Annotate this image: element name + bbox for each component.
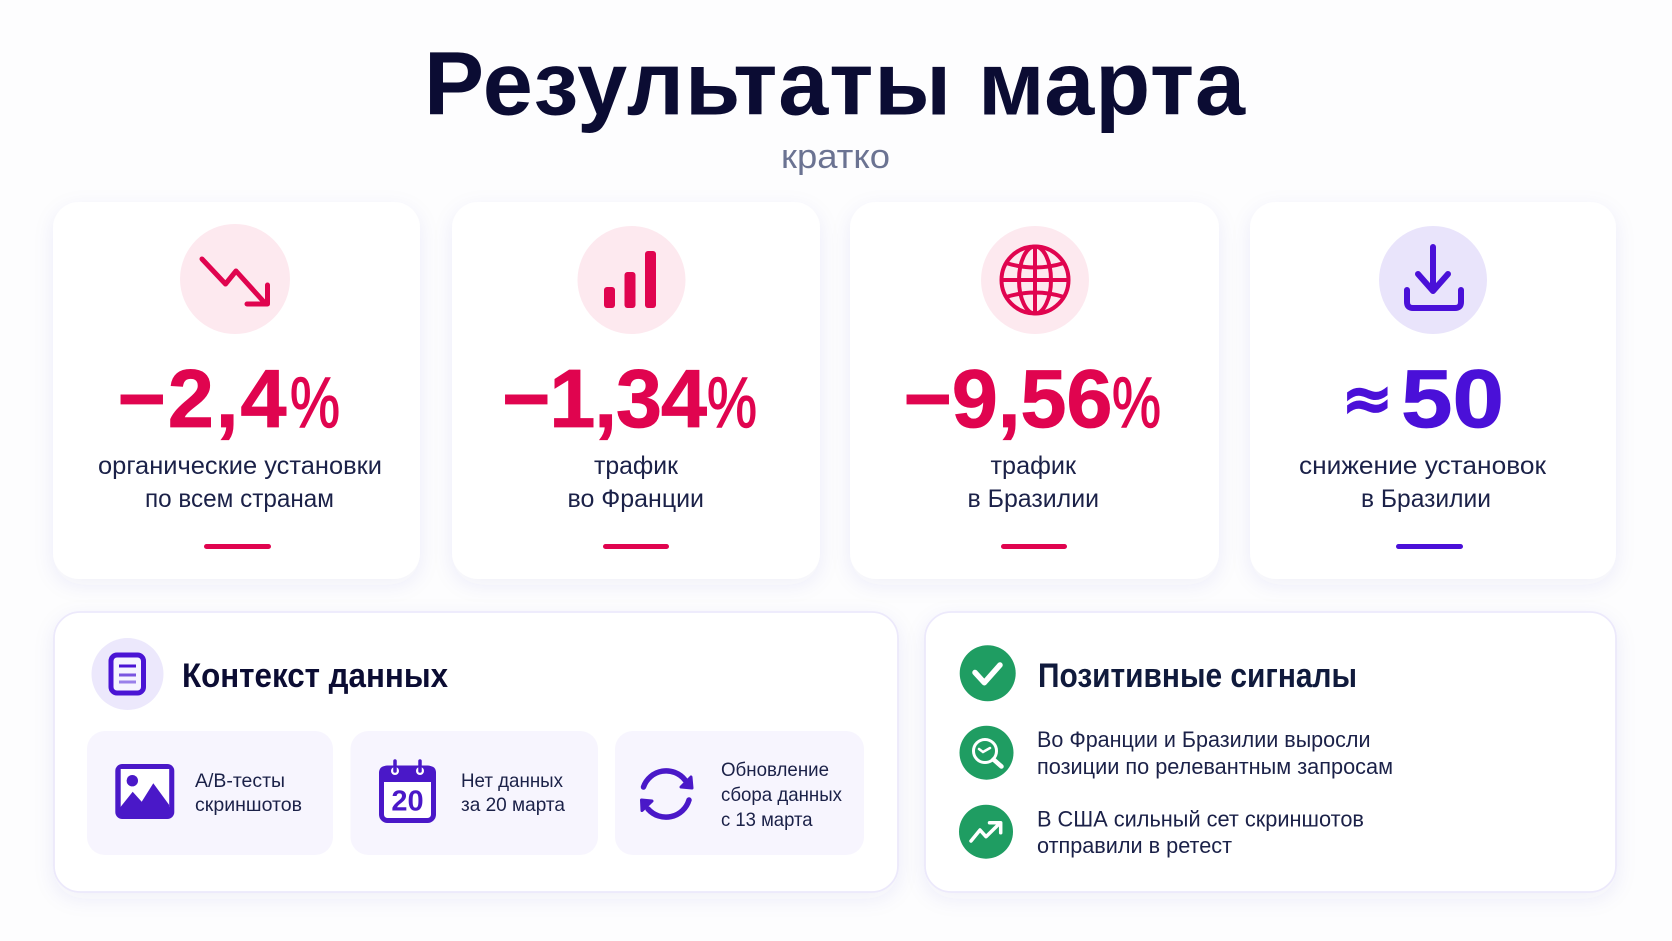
- label: в Бразилии: [968, 485, 1099, 513]
- label: [98, 452, 382, 513]
- text: Обновление: [721, 759, 829, 781]
- label: органические установки: [98, 452, 382, 480]
- percent sign: %: [1112, 364, 1161, 443]
- icon: download: [1379, 226, 1487, 334]
- text: сбора данных: [721, 784, 842, 806]
- panel: organic installs: [53, 202, 420, 579]
- icon: check: [960, 645, 1016, 701]
- text: с 13 марта: [721, 809, 813, 831]
- label: [968, 452, 1099, 513]
- sub-card: refresh: [615, 731, 864, 855]
- label: по всем странам: [145, 485, 334, 513]
- label: [1299, 452, 1547, 513]
- icon: trend up: [959, 805, 1013, 859]
- value: −1,34: [502, 352, 707, 445]
- label: в Бразилии: [1361, 485, 1491, 513]
- text: позиции по релевантным запросам: [1037, 754, 1393, 779]
- text: за 20 марта: [461, 794, 565, 816]
- label: во Франции: [568, 485, 704, 513]
- icon: image: [115, 764, 174, 819]
- label: трафик: [594, 452, 679, 480]
- panel: Brazil traffic: [850, 202, 1219, 579]
- sub-card: no data: [350, 731, 598, 855]
- icon: calendar: [379, 761, 436, 820]
- panel: France traffic: [452, 202, 820, 579]
- icon: magnifier: [960, 726, 1014, 780]
- signal: USA: [959, 805, 1364, 859]
- icon: calendar: 20: [391, 786, 424, 818]
- text: [461, 770, 565, 816]
- title: Результаты марта: [424, 34, 1246, 134]
- icon: globe: [981, 226, 1089, 334]
- icon: bars: [578, 226, 686, 334]
- value: −2,4: [118, 352, 286, 445]
- panel: Brazil installs: [1250, 202, 1616, 579]
- text: [721, 759, 842, 831]
- text: [1037, 727, 1393, 779]
- text: В США сильный сет скриншотов: [1037, 806, 1364, 832]
- heading: Контекст данных: [182, 657, 448, 695]
- subtitle: кратко: [781, 138, 890, 176]
- label: снижение установок: [1299, 452, 1547, 480]
- icon: document: [92, 638, 164, 710]
- text: скриншотов: [195, 794, 302, 816]
- label: [568, 452, 704, 513]
- text: Во Франции и Бразилии выросли: [1037, 727, 1370, 752]
- signal: France and Brazil: [960, 726, 1393, 780]
- icon: trend down: [180, 224, 290, 334]
- text: А/В-тесты: [195, 770, 285, 792]
- panel: data context: [54, 612, 898, 892]
- sub-card: A/B tests: [87, 731, 333, 855]
- value: 50: [1401, 352, 1504, 445]
- text: отправили в ретест: [1037, 833, 1232, 858]
- label: трафик: [990, 452, 1077, 480]
- text: Нет данных: [461, 770, 563, 792]
- text: [1037, 806, 1364, 858]
- value: −9,56: [904, 352, 1112, 445]
- percent sign: %: [290, 364, 340, 443]
- percent sign: %: [707, 364, 757, 443]
- approx sign: ≈: [1341, 362, 1394, 435]
- panel: positive signals: [925, 612, 1616, 892]
- icon: refresh: [642, 771, 692, 817]
- heading: Позитивные сигналы: [1038, 657, 1357, 695]
- text: [195, 770, 302, 816]
